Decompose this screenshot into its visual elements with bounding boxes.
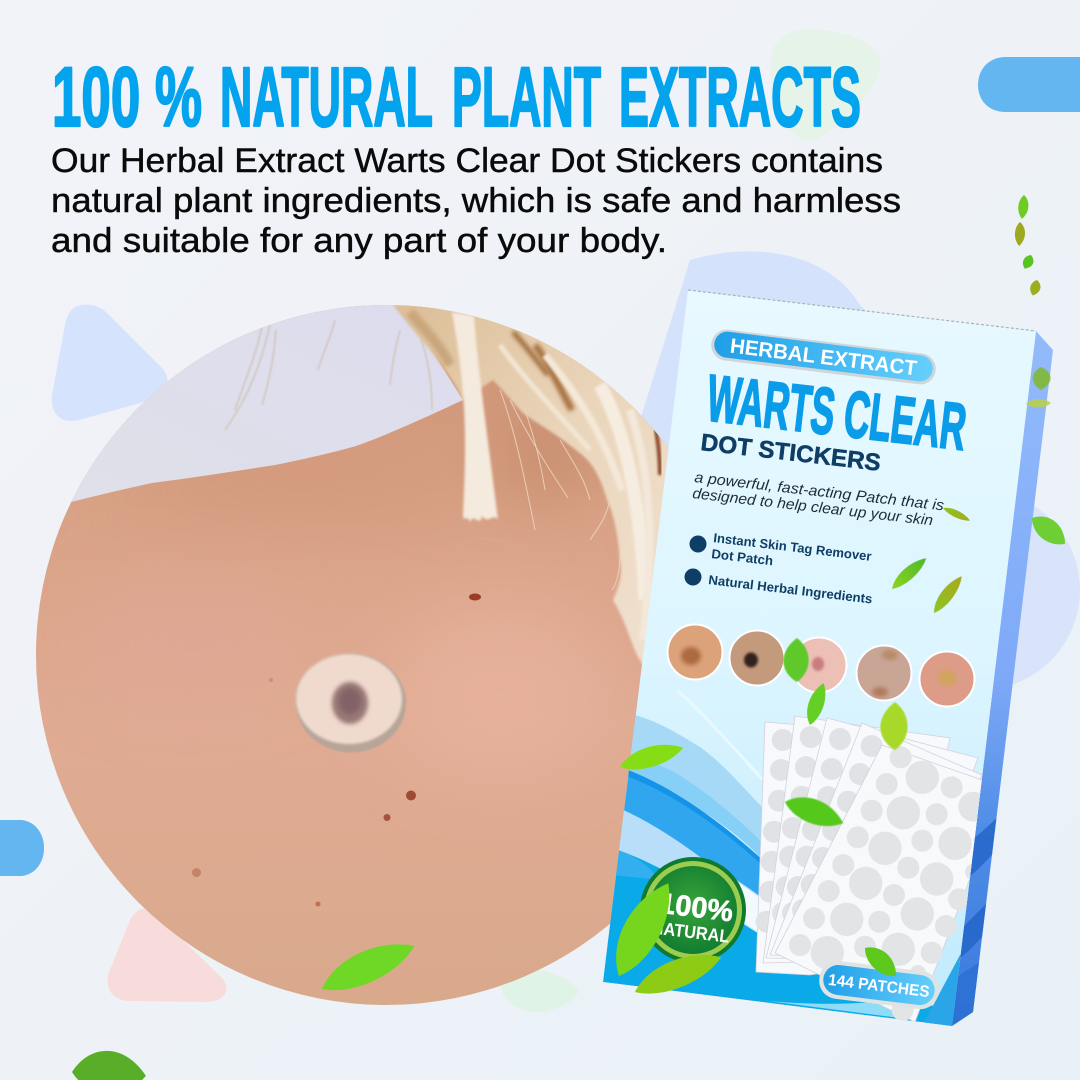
box bullets: Instant Skin Tag Remover — [713, 530, 872, 564]
pill: 144 patches — [817, 959, 941, 1011]
box subtitle: DOT STICKERS — [699, 429, 882, 477]
intro text: natural plant ingredients, which is safe and harmless — [51, 182, 901, 220]
box description: a powerful, fast-acting Patch that is — [694, 469, 945, 514]
pill: 144 patches: 144 PATCHES — [827, 972, 931, 1001]
front sheet — [775, 745, 1000, 1022]
box top edge — [688, 290, 1036, 331]
natural badge — [640, 857, 746, 963]
back sheet 3 — [766, 718, 978, 960]
intro text: and suitable for any part of your body. — [51, 222, 667, 260]
intro text: Our Herbal Extract Warts Clear Dot Stickers contains — [51, 142, 883, 180]
skin tone blotches — [433, 420, 594, 708]
box front waves — [603, 689, 960, 1026]
box bullets: Natural Herbal Ingredients — [708, 572, 873, 607]
product box — [603, 290, 1053, 1030]
title: NATURAL — [220, 50, 433, 144]
box description — [692, 469, 945, 529]
pill: herbal extract: HERBAL EXTRACT — [729, 335, 918, 380]
mole spots — [192, 594, 481, 906]
patch sheets — [756, 716, 1000, 1022]
box front panel — [603, 290, 1036, 1026]
falling leaves — [71, 195, 1072, 1080]
thin hair strands — [500, 390, 621, 590]
natural badge: NATURAL — [651, 917, 731, 947]
natural badge: 100% — [657, 888, 735, 928]
back sheet 2 — [763, 716, 950, 963]
intro text — [51, 142, 901, 260]
box bullets: Dot Patch — [711, 546, 774, 568]
long white-blond strand — [452, 312, 498, 522]
box bullets — [684, 530, 873, 607]
title: 100 % — [52, 50, 202, 144]
hair streaks — [410, 312, 660, 640]
back sheet 4 — [770, 723, 982, 960]
skin condition photos — [668, 624, 974, 706]
circular skin photo — [36, 305, 668, 1005]
back sheet 1 — [756, 722, 818, 976]
hair wisps on fabric — [225, 320, 432, 430]
patch on mole — [296, 654, 406, 752]
title: PLANT — [452, 50, 601, 144]
pill: herbal extract — [709, 328, 938, 386]
title — [52, 50, 861, 144]
fabric above shoulder — [72, 305, 463, 502]
box side panel — [945, 331, 1053, 1030]
box description: designed to help clear up your skin — [692, 485, 934, 529]
title: EXTRACTS — [619, 50, 861, 144]
blond hair mass — [393, 300, 680, 680]
